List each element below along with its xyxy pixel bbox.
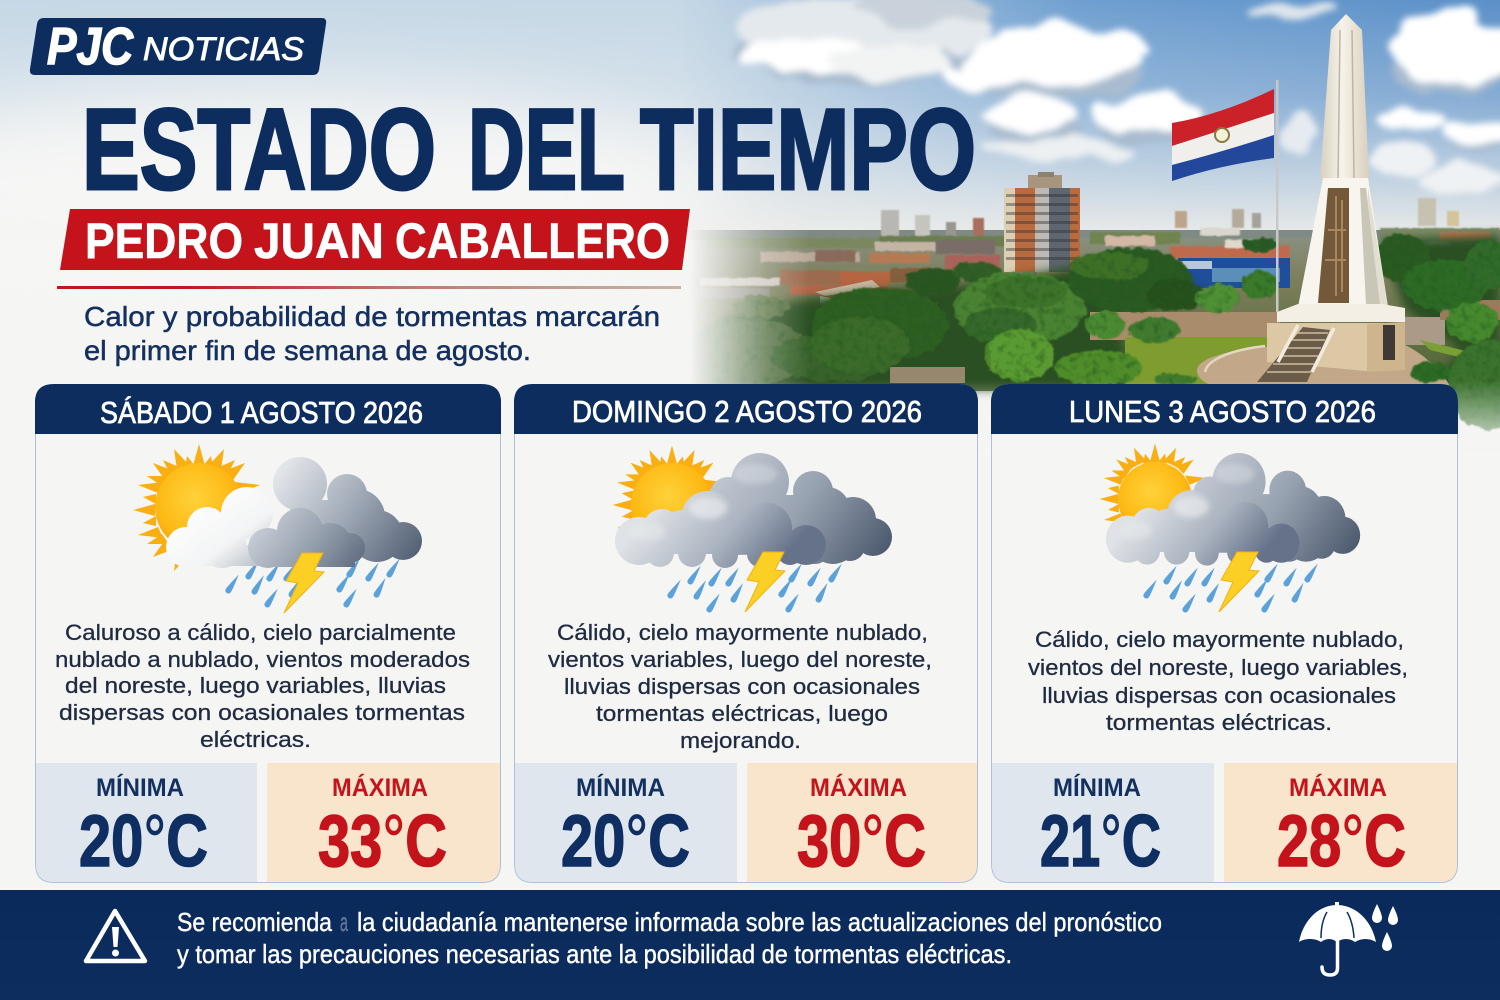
monument — [1257, 14, 1405, 382]
maximum temperature: 30°C — [797, 801, 926, 882]
forecast text — [55, 620, 470, 752]
forecast text: Caluroso a cálido, cielo parcialmente — [65, 620, 456, 645]
day header — [35, 384, 501, 434]
forecast text: tormentas eléctricas, luego — [596, 701, 888, 726]
icon: sun, clouds, lightning and rain — [133, 444, 422, 613]
distant towers — [881, 198, 1459, 238]
fade from city to page — [680, 380, 1500, 460]
forecast text: mejorando. — [680, 728, 801, 753]
aerial city landscape — [680, 14, 1500, 430]
subtitle — [84, 301, 660, 366]
maximum temperature: 33°C — [318, 801, 447, 882]
forecast text: Cálido, cielo mayormente nublado, — [1035, 627, 1404, 652]
panel: Domingo 2 agosto — [514, 384, 978, 882]
tall apartment building — [1004, 172, 1080, 272]
icon: sun, clouds, lightning and rain — [613, 446, 892, 614]
day header — [514, 384, 978, 434]
minimum temperature: 20°C — [79, 801, 208, 882]
maximum temperature — [1224, 763, 1457, 882]
recommendation text — [177, 907, 1162, 969]
minimum temperature: 21°C — [1040, 801, 1161, 882]
maximum temperature — [747, 763, 977, 882]
minimum temperature: MÍNIMA — [1053, 773, 1141, 802]
forecast text: lluvias dispersas con ocasionales — [1042, 683, 1396, 708]
dark green tree base — [720, 235, 1500, 390]
minimum temperature: MÍNIMA — [576, 773, 665, 802]
forecast text: lluvias dispersas con ocasionales — [564, 674, 920, 699]
forecast text: tormentas eléctricas. — [1106, 710, 1332, 735]
forecast text — [1028, 627, 1408, 735]
icon: umbrella and raindrops — [1299, 902, 1398, 975]
minimum temperature — [515, 763, 737, 882]
day header: DOMINGO 2 AGOSTO 2026 — [572, 394, 922, 429]
roofs and low buildings — [690, 228, 1500, 298]
forecast text — [548, 620, 932, 753]
recommendation text: Se recomienda — [177, 907, 332, 937]
title: ESTADO — [82, 86, 436, 214]
recommendation text: y tomar las precauciones necesarias ante la posibilidad de tormentas eléctricas. — [177, 939, 1012, 969]
title: DEL — [468, 86, 625, 214]
red banner: city name: PEDRO — [85, 213, 243, 269]
title — [82, 86, 976, 214]
logo: PJC Noticias — [30, 18, 326, 76]
panel: Sábado 1 agosto — [35, 384, 501, 882]
minimum temperature: 20°C — [561, 801, 690, 882]
lawn, road and plaza — [890, 300, 1500, 386]
recommendation text: la ciudadanía mantenerse informada sobre las actualizaciones del pronóstico — [357, 907, 1162, 937]
blue commercial building and house — [815, 258, 1290, 305]
icon: sun, clouds, lightning and rain — [1100, 444, 1360, 614]
maximum temperature: 28°C — [1277, 801, 1406, 882]
recommendation text: a — [340, 907, 348, 937]
logo: PJC Noticias: PJC — [47, 18, 134, 76]
forecast text: del noreste, luego variables, lluvias — [65, 673, 446, 698]
maximum temperature: MÁXIMA — [332, 773, 428, 802]
day header — [991, 384, 1458, 434]
icon: warning triangle — [86, 911, 145, 961]
minimum temperature — [992, 763, 1214, 882]
forecast text: vientos variables, luego del noreste, — [548, 647, 932, 672]
clouds in the sky — [735, 0, 1500, 190]
red banner: city name — [60, 209, 690, 270]
day header: SÁBADO 1 AGOSTO 2026 — [100, 395, 423, 430]
forecast text: eléctricas. — [200, 727, 311, 752]
day header: LUNES 3 AGOSTO 2026 — [1069, 394, 1376, 429]
minimum temperature: MÍNIMA — [96, 773, 184, 802]
footer alert band — [0, 890, 1500, 1000]
subtitle: el primer fin de semana de agosto. — [84, 335, 531, 366]
maximum temperature: MÁXIMA — [1289, 773, 1387, 802]
red banner: city name: JUAN — [254, 213, 384, 269]
red banner: city name: CABALLERO — [395, 213, 670, 269]
maximum temperature: MÁXIMA — [810, 773, 907, 802]
maximum temperature — [267, 763, 500, 882]
forecast text: nublado a nublado, vientos moderados — [55, 647, 470, 672]
panel: Lunes 3 agosto — [991, 384, 1458, 882]
forecast text: vientos del noreste, luego variables, — [1028, 655, 1408, 680]
subtitle: Calor y probabilidad de tormentas marcarán — [84, 301, 660, 332]
logo: PJC Noticias: NOTICIAS — [143, 31, 304, 67]
trees and palms — [685, 234, 1500, 430]
minimum temperature — [36, 763, 257, 882]
title: TIEMPO — [640, 86, 976, 214]
flag of Paraguay — [1172, 80, 1278, 312]
forecast text: dispersas con ocasionales tormentas — [59, 700, 465, 725]
forecast text: Cálido, cielo mayormente nublado, — [557, 620, 928, 645]
